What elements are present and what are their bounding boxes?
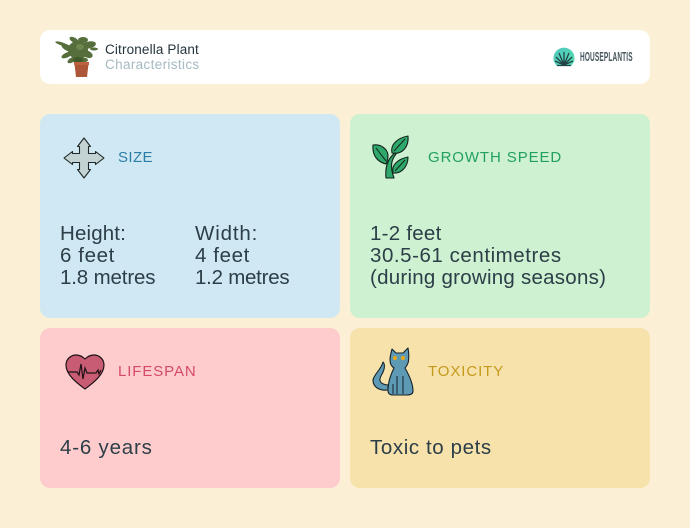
text: lifespan years: 4-6 years	[60, 436, 153, 459]
text: height	[60, 222, 155, 289]
text: growth details: (during growing seasons)	[370, 266, 606, 289]
icon: leaves	[372, 136, 409, 178]
panel: growth speed	[350, 114, 650, 318]
heading: toxicity: TOXICITY	[428, 363, 504, 380]
text: height: 1.8 metres	[60, 266, 155, 289]
text: growth details: 1-2 feet	[370, 222, 442, 245]
panel: toxicity	[350, 328, 650, 488]
logo: Houseplantis	[554, 48, 633, 66]
text: width: 1.2 metres	[195, 266, 289, 289]
text: width: Width:	[195, 222, 258, 245]
text: width	[195, 222, 289, 289]
icon: four-way arrows	[64, 137, 104, 179]
text: growth details: 30.5-61 centimetres	[370, 244, 562, 267]
icon: blue cat	[372, 347, 414, 396]
icon: logo mark	[554, 48, 574, 66]
title: Characteristics	[105, 57, 200, 72]
icon: heart with pulse	[65, 354, 105, 390]
text: height: 6 feet	[60, 244, 115, 267]
text: toxicity details: Toxic to pets	[370, 436, 492, 459]
heading: lifespan: LIFESPAN	[118, 363, 197, 380]
title: Citronella Plant	[105, 42, 199, 57]
icon: potted citronella plant	[55, 36, 98, 77]
logo text: HOUSEPLANTIS	[580, 49, 633, 64]
heading: size: SIZE	[118, 149, 153, 166]
panel: size	[40, 114, 340, 318]
header bar	[40, 30, 650, 84]
text: growth details	[370, 222, 606, 289]
panel: lifespan	[40, 328, 340, 488]
title	[105, 42, 200, 72]
text: width: 4 feet	[195, 244, 250, 267]
heading: growth speed: GROWTH SPEED	[428, 149, 562, 166]
text: height: Height:	[60, 222, 126, 245]
